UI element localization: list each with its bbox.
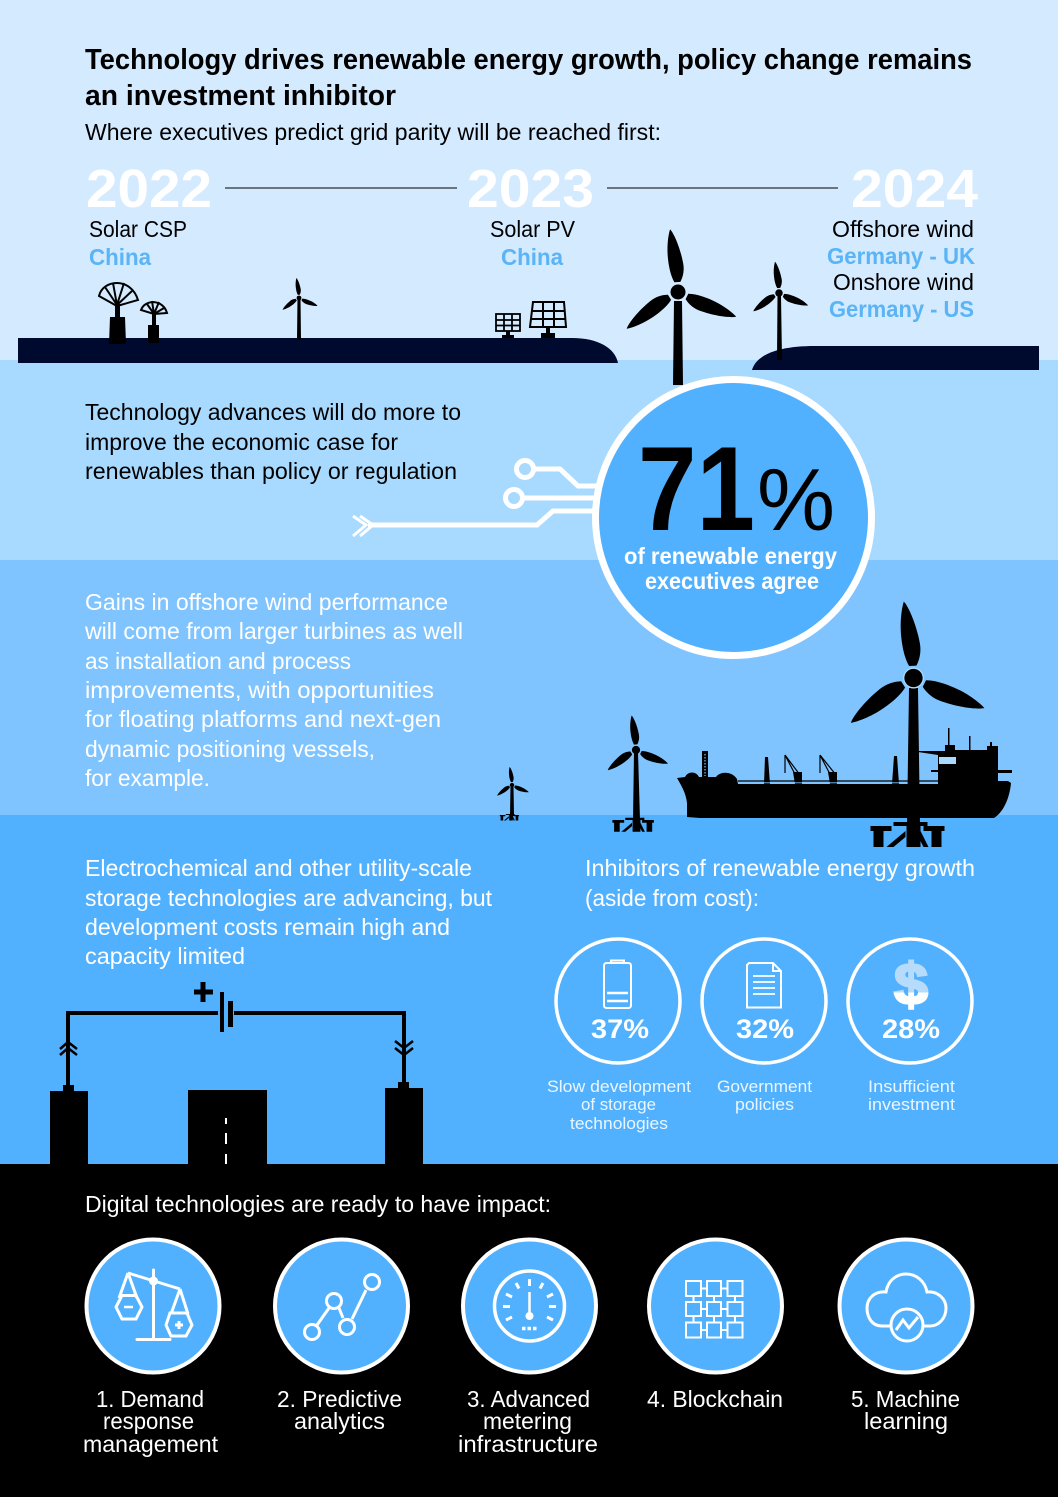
panel: 32% government policies — [702, 939, 826, 1114]
label: metering — [483, 1408, 572, 1434]
2024 label: wind markets: Onshore wind — [833, 269, 974, 295]
left island — [18, 338, 618, 363]
title: an investment inhibitor — [85, 80, 396, 112]
caption: renewable energy executives agree — [624, 543, 837, 594]
label: 2. Predictive — [277, 1386, 402, 1412]
panel: 37% slow development of storage: 37% — [591, 1014, 649, 1044]
text: offshore wind gains: for example. — [85, 765, 210, 791]
2022 label: Solar CSP China: China — [89, 244, 151, 270]
stat: 71%: % — [757, 450, 835, 549]
text: storage technologies: capacity limited — [85, 943, 245, 969]
text: offshore wind gains: as installation and process — [85, 648, 351, 674]
subtitle: Where executives predict grid parity will be reached first: — [85, 119, 661, 145]
heading: inhibitors — [585, 855, 975, 911]
timeline: years: 2024 — [851, 159, 978, 219]
panel: predictive analytics — [275, 1240, 408, 1434]
2023 label: Solar PV China: China — [501, 244, 563, 270]
label — [868, 1077, 955, 1114]
caption: renewable energy executives agree: executives agree — [645, 568, 819, 594]
label: technologies — [570, 1114, 668, 1133]
2023 label: Solar PV China: Solar PV — [490, 216, 576, 242]
2022 label: Solar CSP China: Solar CSP — [89, 216, 187, 242]
label: 1. Demand — [96, 1386, 204, 1412]
icon: battery circuit diagram — [50, 982, 423, 1164]
icon: solar CSP dishes — [99, 283, 167, 344]
text: storage technologies — [85, 855, 493, 969]
icon: small onshore turbine — [281, 278, 318, 340]
title: Technology drives renewable energy growth, policy change remains — [85, 44, 972, 76]
icon: large floating turbine on vessel — [844, 601, 987, 847]
icon: scales — [116, 1270, 192, 1340]
stat: 71% — [638, 422, 835, 556]
panel: demand response management — [83, 1240, 220, 1457]
2024 label: wind markets: Offshore wind — [832, 216, 974, 242]
label — [717, 1077, 812, 1114]
icon: large turbine — [621, 229, 738, 385]
icon: solar panels — [496, 302, 566, 338]
text: offshore wind gains: dynamic positioning vessels, — [85, 736, 375, 762]
label: 3. Advanced — [467, 1386, 590, 1412]
label: learning — [864, 1408, 948, 1434]
icon: small floating turbine — [605, 715, 669, 832]
text: storage technologies: development costs remain high and — [85, 914, 450, 940]
timeline: years — [86, 159, 978, 219]
panel: 32% government policies: 32% — [736, 1014, 794, 1044]
heading: inhibitors: (aside from cost): — [585, 885, 759, 911]
label: response — [103, 1408, 194, 1434]
heading: inhibitors: Inhibitors of renewable energy growth — [585, 855, 975, 881]
icon: line chart — [304, 1274, 380, 1340]
text: offshore wind gains — [84, 589, 463, 791]
label: 5. Machine — [851, 1386, 960, 1412]
title — [85, 44, 972, 112]
label — [851, 1386, 960, 1434]
text: technology advances: improve the economic case for — [85, 429, 398, 455]
label: Insufficient — [868, 1077, 955, 1096]
2024 label: wind markets: Germany - UK — [827, 243, 975, 269]
label — [277, 1386, 402, 1434]
icon: block grid — [686, 1281, 742, 1338]
label: Slow development — [547, 1077, 691, 1096]
text: offshore wind gains: will come from larger turbines as well — [84, 618, 463, 644]
text: technology advances: Technology advances will do more to — [85, 399, 461, 425]
stat: 71%: 71 — [638, 422, 755, 556]
label: infrastructure — [458, 1431, 598, 1457]
text: technology advances: renewables than policy or regulation — [85, 458, 457, 484]
label: analytics — [294, 1408, 385, 1434]
label — [547, 1077, 691, 1133]
2024 label: wind markets: Germany - US — [829, 296, 974, 322]
label: of storage — [581, 1095, 656, 1114]
circuit arrow lines — [353, 460, 598, 536]
text: storage technologies: Electrochemical and other utility-scale — [85, 855, 472, 881]
panel: machine learning — [840, 1240, 972, 1434]
label: investment — [868, 1095, 955, 1114]
heading: digital technologies: Digital technologies are ready to have impact: — [85, 1191, 551, 1217]
icon: tiny floating turbine — [495, 767, 529, 820]
text: offshore wind gains: improvements, with opportunities — [85, 677, 434, 703]
icon: gauge — [494, 1271, 564, 1341]
timeline: years: 2023 — [467, 159, 594, 219]
label — [83, 1386, 219, 1457]
panel: 37% slow development of storage — [547, 939, 691, 1133]
text: storage technologies: storage technologies are advancing, but — [85, 885, 493, 911]
icon: dollar sign: $ — [894, 952, 928, 1017]
text: offshore wind gains: Gains in offshore wind performance — [85, 589, 448, 615]
caption: renewable energy executives agree: of renewable energy — [624, 543, 837, 569]
label: management — [83, 1431, 219, 1457]
icon: battery — [604, 960, 631, 1008]
2023 label: Solar PV China — [490, 216, 576, 270]
right island — [752, 346, 1039, 370]
panel: advanced metering infrastructure — [458, 1240, 598, 1457]
icon: turbine on right island — [750, 261, 809, 360]
text: technology advances — [85, 399, 461, 484]
label: policies — [735, 1095, 794, 1114]
label — [458, 1386, 598, 1457]
panel: blockchain — [647, 1240, 783, 1412]
panel: 28% insufficient investment: 28% — [882, 1014, 940, 1044]
2022 label: Solar CSP China — [89, 216, 187, 270]
timeline: years: 2022 — [86, 159, 212, 219]
callout: 71% circle — [596, 380, 872, 656]
text: offshore wind gains: for floating platforms and next-gen — [85, 706, 441, 732]
icon: installation vessel — [677, 728, 1012, 818]
label: Government — [717, 1077, 812, 1096]
2024 label: wind markets — [827, 216, 975, 322]
icon: cloud with chart — [867, 1274, 946, 1341]
icon: document — [747, 963, 781, 1008]
panel: 28% insufficient investment — [848, 939, 972, 1114]
label: 4. Blockchain — [647, 1386, 783, 1412]
